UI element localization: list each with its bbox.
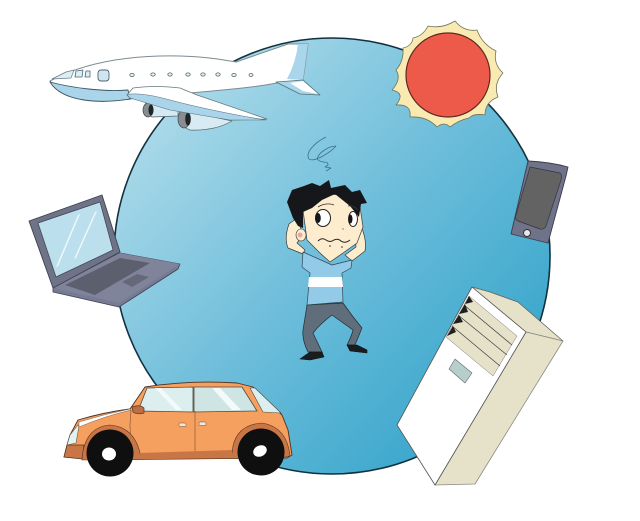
hair <box>287 180 367 228</box>
worry scribble <box>308 137 336 171</box>
face <box>303 193 363 262</box>
sun <box>392 21 503 127</box>
worried person <box>286 137 367 360</box>
air conditioner <box>397 287 563 485</box>
blue globe circle <box>114 38 550 474</box>
shirt <box>302 252 352 305</box>
airplane <box>50 44 320 130</box>
car <box>64 382 292 476</box>
laptop <box>29 195 180 307</box>
shoes <box>300 345 367 360</box>
mouth <box>318 239 350 242</box>
eyes <box>316 210 330 226</box>
phone <box>511 161 568 243</box>
arms <box>286 218 366 261</box>
pants <box>303 303 362 352</box>
